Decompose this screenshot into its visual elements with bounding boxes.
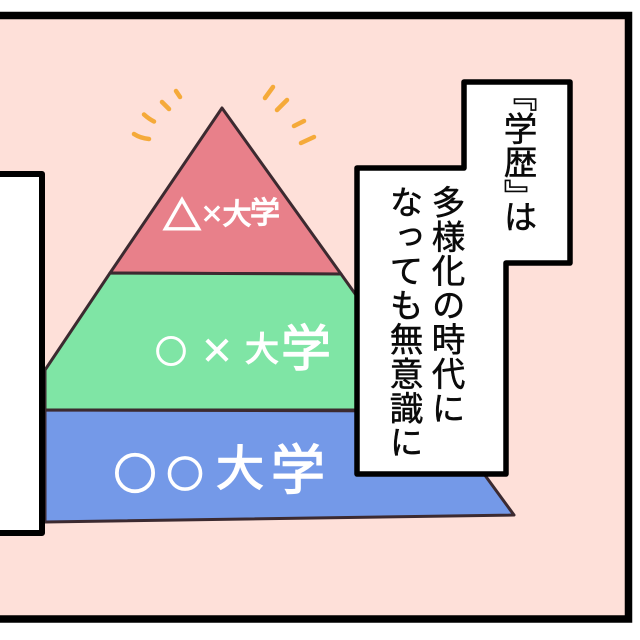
label: top tier: △ — [163, 186, 201, 241]
label: middle tier: ○ — [156, 327, 186, 372]
label: top tier: 学 — [250, 188, 280, 232]
label: bottom tier: ○ — [167, 446, 203, 498]
caption line 1: 『学歴 』 は — [498, 78, 535, 233]
label: bottom tier — [114, 426, 325, 505]
pyramid tier: bottom blue — [45, 410, 514, 522]
label: top tier — [163, 186, 280, 241]
label: bottom tier: 大 — [216, 429, 264, 499]
label: bottom tier: 学 — [271, 426, 325, 505]
pyramid tier: middle green — [45, 273, 438, 410]
label: bottom tier: ○ — [114, 441, 156, 502]
label: top tier: × — [201, 197, 223, 229]
icon: orange sparkle lines right — [265, 87, 314, 143]
left caption box — [0, 174, 42, 533]
pyramid chart — [45, 108, 514, 522]
label: middle tier — [156, 309, 331, 381]
caption box outline — [357, 82, 570, 474]
icon: orange sparkle lines left — [134, 91, 180, 139]
pyramid tier: top red — [110, 108, 341, 274]
label: middle tier: 大 — [245, 322, 279, 371]
label: middle tier: 学 — [281, 309, 331, 381]
label: middle tier: × — [201, 326, 233, 372]
caption line 3: なっても無意識に — [384, 185, 421, 459]
label: top tier: 大 — [222, 191, 252, 233]
caption line 2: 多様化の時代に — [426, 185, 463, 425]
